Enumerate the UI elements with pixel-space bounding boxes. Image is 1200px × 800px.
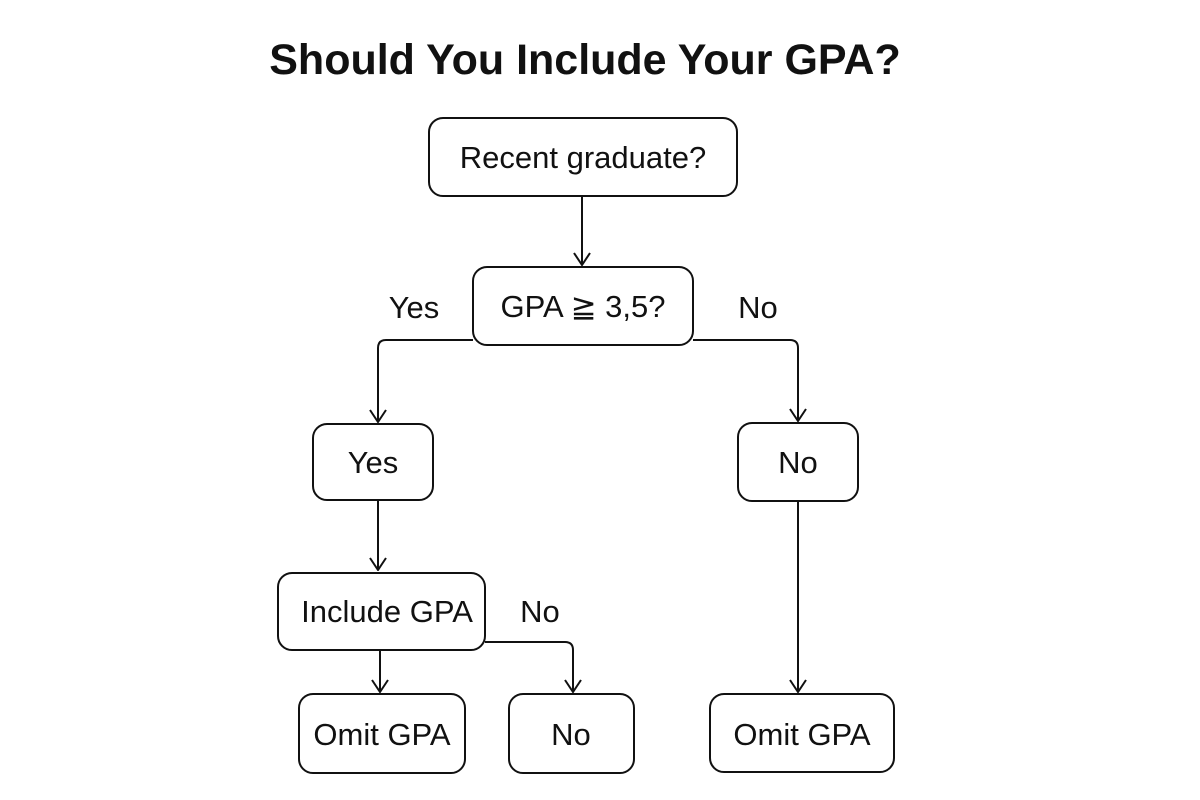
box: yes (313, 424, 433, 500)
box: omit gpa left: Omit GPA (313, 717, 451, 752)
box: recent graduate (429, 118, 737, 196)
box: omit gpa right (710, 694, 894, 772)
box: no bottom (509, 694, 634, 773)
arrow: include to no (485, 642, 573, 692)
box: omit gpa right: Omit GPA (733, 717, 871, 752)
box: recent graduate: Recent graduate? (460, 140, 706, 175)
arrow: yes branch (378, 340, 473, 422)
box: omit gpa left (299, 694, 465, 773)
arrow: yes to include (377, 500, 379, 570)
box: gpa question: GPA ≧ 3,5? (500, 289, 666, 324)
box: no: No (778, 445, 818, 480)
arrow: recent to gpa (581, 196, 583, 265)
label: no: No (738, 290, 778, 325)
arrow: no to omit (797, 501, 799, 692)
arrow: include to omit (379, 650, 381, 692)
arrow: no branch (693, 340, 798, 421)
box: yes: Yes (348, 445, 398, 480)
title: Should You Include Your GPA? (269, 36, 901, 84)
box: include gpa (278, 573, 485, 650)
label: no (include): No (520, 594, 560, 629)
box: no (738, 423, 858, 501)
label: yes: Yes (389, 290, 439, 325)
box: no bottom: No (551, 717, 591, 752)
box: include gpa: Include GPA (301, 594, 473, 629)
box: gpa question (473, 267, 693, 345)
